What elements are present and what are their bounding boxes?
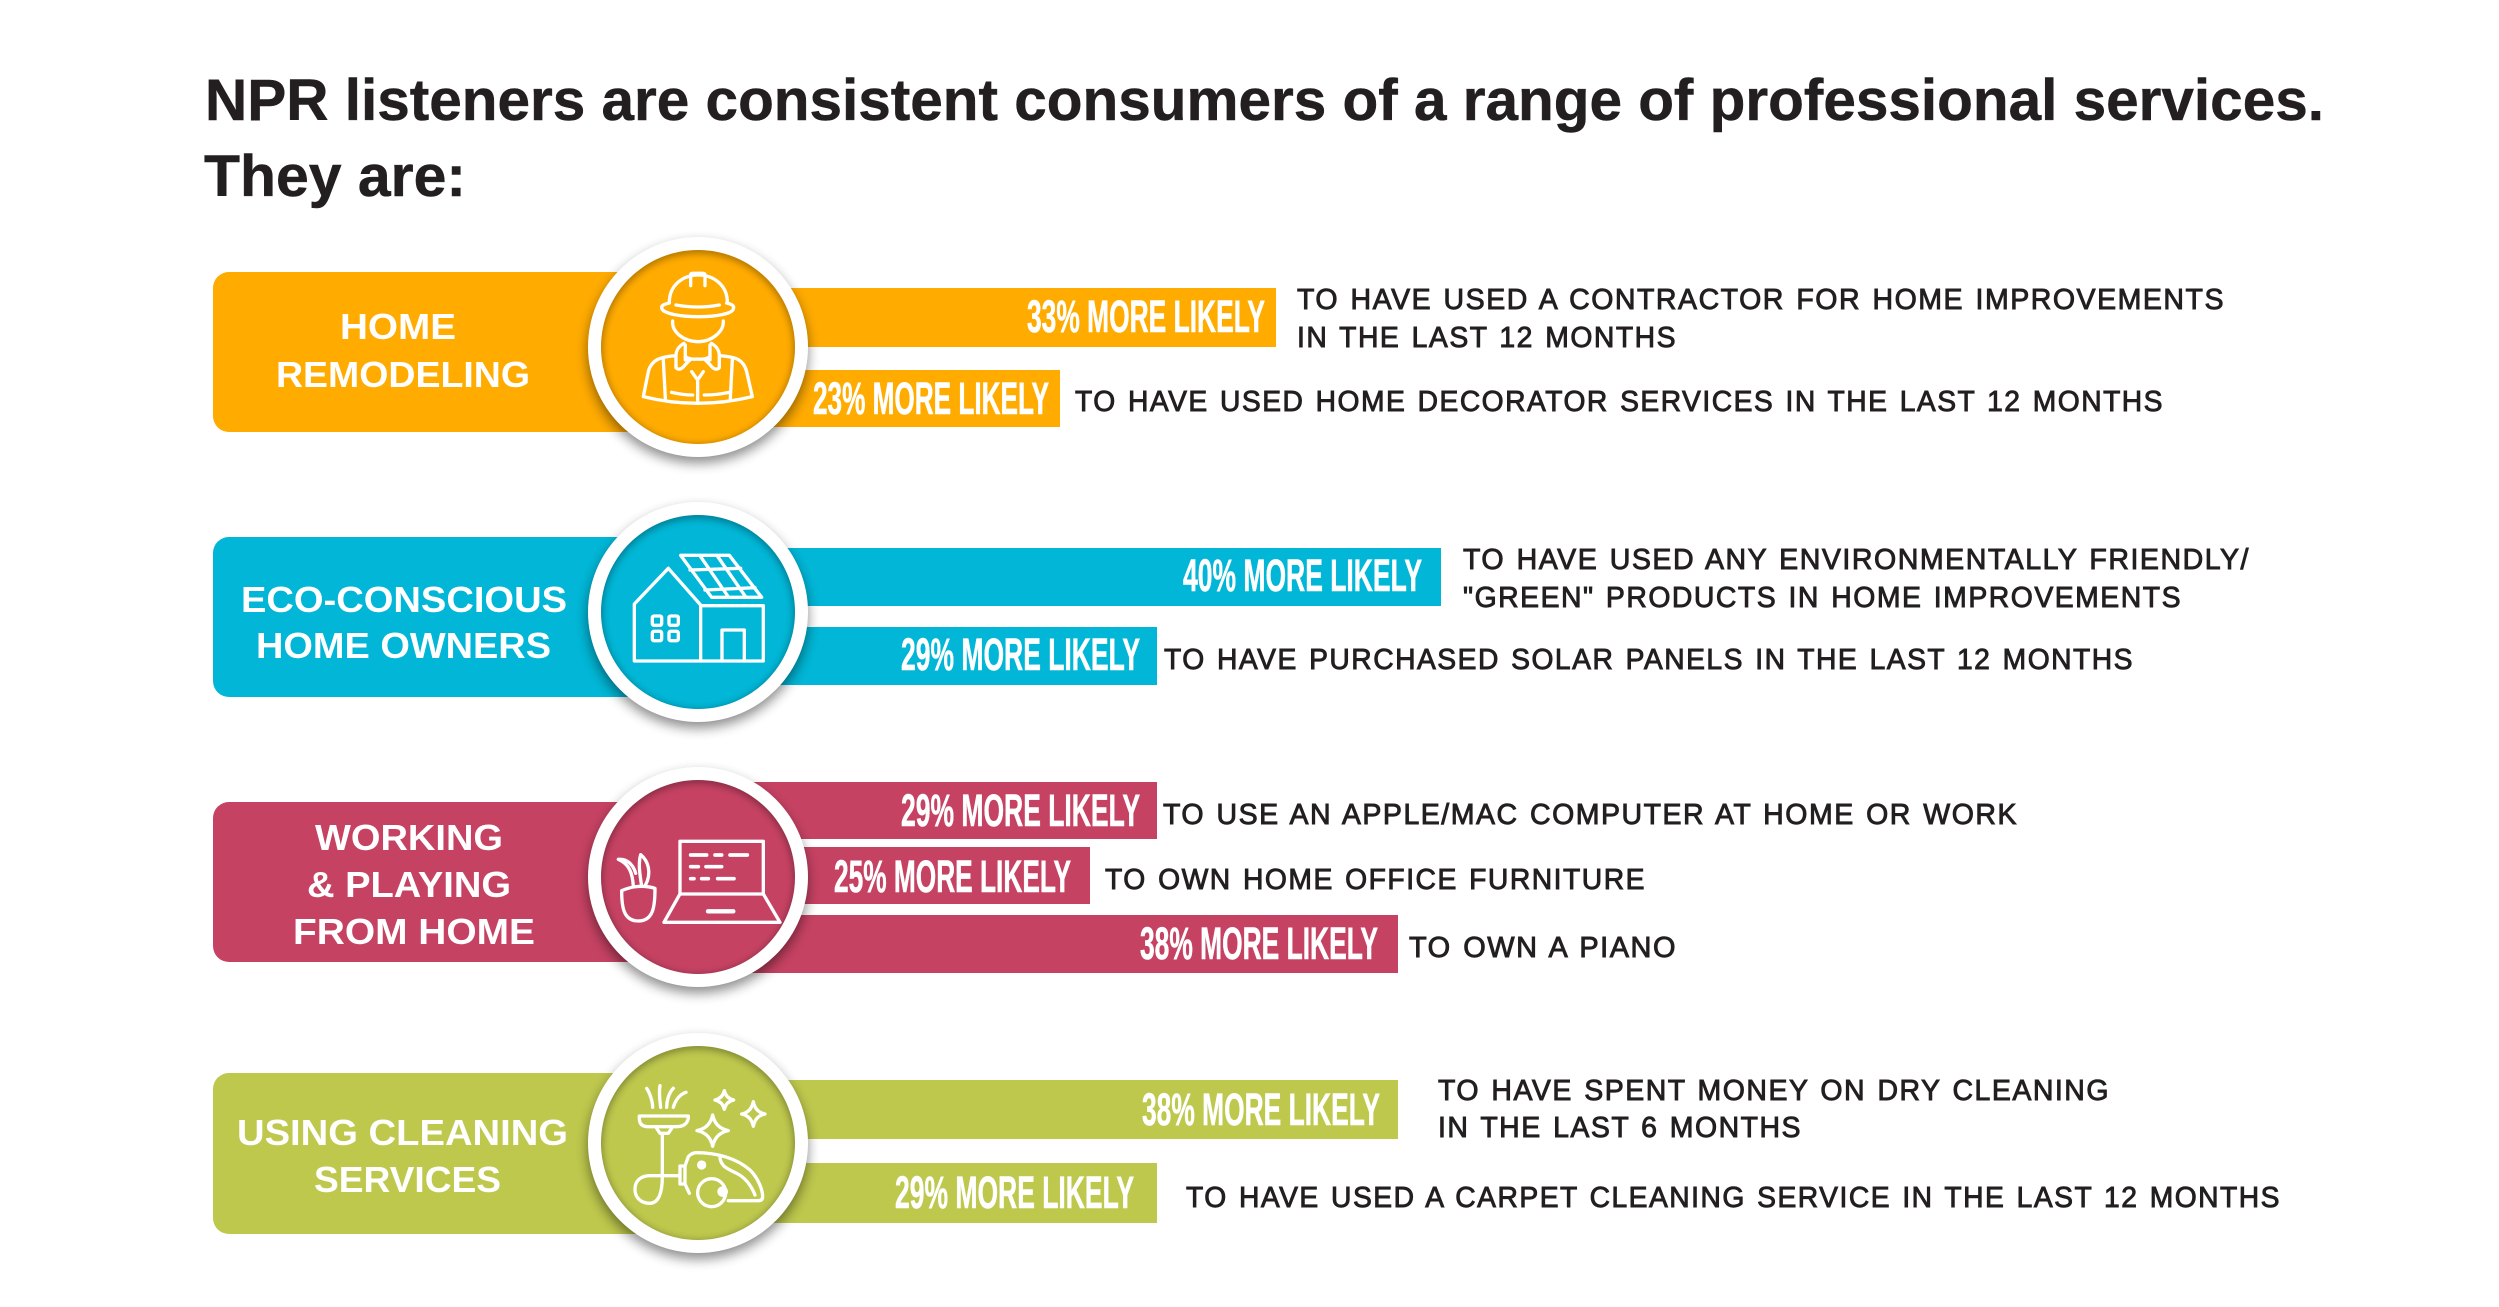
description: contractor: IN THE LAST 12 MONTHS xyxy=(1297,322,1677,354)
title: NPR listeners are consistent consumers of a range of professional services. xyxy=(205,68,2324,133)
category label: working and playing from home: WORKING xyxy=(315,817,503,858)
icon badge: construction worker xyxy=(588,237,808,463)
panel: using cleaning services xyxy=(213,1033,2281,1259)
bar: 25% more likely xyxy=(700,847,1090,904)
description: dry cleaning: IN THE LAST 6 MONTHS xyxy=(1438,1112,1802,1144)
description: dry cleaning: TO HAVE SPENT MONEY ON DRY CLEANING xyxy=(1438,1075,2110,1107)
description: contractor xyxy=(1297,284,2225,354)
category label: eco-conscious home owners: HOME OWNERS xyxy=(256,625,551,666)
title xyxy=(204,68,2324,209)
category label: working and playing from home: & PLAYING xyxy=(307,864,511,905)
description: solar panels: TO HAVE PURCHASED SOLAR PANELS IN THE LAST 12 MONTHS xyxy=(1164,644,2134,676)
category label: eco-conscious home owners xyxy=(213,537,713,697)
bar: 40% more likely: 40% MORE LIKELY xyxy=(1183,550,1422,601)
description: home decorator: TO HAVE USED HOME DECORATOR SERVICES IN THE LAST 12 MONTHS xyxy=(1075,386,2164,418)
category label: using cleaning services xyxy=(213,1073,713,1234)
description: carpet cleaning: TO HAVE USED A CARPET CLEANING SERVICE IN THE LAST 12 MONTHS xyxy=(1186,1182,2281,1214)
description: green products xyxy=(1463,544,2250,614)
description: dry cleaning xyxy=(1438,1075,2110,1144)
panel: working and playing from home xyxy=(213,767,2018,993)
panel: eco-conscious home owners xyxy=(213,502,2250,728)
category label: eco-conscious home owners: ECO-CONSCIOUS xyxy=(241,579,567,620)
icon badge: solar house xyxy=(588,502,808,728)
category label: home remodeling: REMODELING xyxy=(276,354,530,395)
bar: 38% more likely: 38% MORE LIKELY xyxy=(1142,1084,1380,1135)
title: They are: xyxy=(204,144,466,209)
category label: home remodeling xyxy=(213,272,713,432)
bar: 33% more likely xyxy=(700,288,1276,347)
bar: 23% more likely xyxy=(700,370,1060,427)
category label: working and playing from home xyxy=(213,802,713,962)
category label: home remodeling: HOME xyxy=(340,306,456,347)
bar: 29% more likely: 29% MORE LIKELY xyxy=(901,629,1140,680)
category label: using cleaning services: SERVICES xyxy=(314,1159,501,1200)
description: piano: TO OWN A PIANO xyxy=(1409,932,1677,964)
bar: 38% more likely: 38% MORE LIKELY xyxy=(1140,918,1378,969)
bar: 29% more likely xyxy=(700,782,1157,839)
description: apple computer: TO USE AN APPLE/MAC COMPUTER AT HOME OR WORK xyxy=(1163,799,2018,831)
description: home office furniture: TO OWN HOME OFFICE FURNITURE xyxy=(1105,864,1646,896)
bar: 40% more likely xyxy=(700,548,1441,606)
bar: 33% more likely: 33% MORE LIKELY xyxy=(1027,291,1265,342)
category label: using cleaning services: USING CLEANING xyxy=(237,1112,568,1153)
icon badge: laptop and plant xyxy=(588,767,808,993)
bar: 29% more likely xyxy=(700,1163,1157,1223)
bar: 38% more likely xyxy=(700,1080,1398,1139)
description: green products: "GREEN" PRODUCTS IN HOME IMPROVEMENTS xyxy=(1463,582,2182,614)
bar: 29% more likely: 29% MORE LIKELY xyxy=(901,785,1140,836)
bar: 29% more likely xyxy=(700,627,1157,685)
bar: 29% more likely: 29% MORE LIKELY xyxy=(895,1167,1134,1218)
bar: 25% more likely: 25% MORE LIKELY xyxy=(834,851,1071,902)
description: green products: TO HAVE USED ANY ENVIRONMENTALLY FRIENDLY/ xyxy=(1463,544,2250,576)
description: contractor: TO HAVE USED A CONTRACTOR FOR HOME IMPROVEMENTS xyxy=(1297,284,2225,316)
bar: 38% more likely xyxy=(700,915,1398,973)
icon badge: vacuum cleaner xyxy=(588,1033,808,1259)
bar: 23% more likely: 23% MORE LIKELY xyxy=(813,373,1049,424)
category label: working and playing from home: FROM HOME xyxy=(293,911,535,952)
panel: home remodeling xyxy=(213,237,2225,463)
